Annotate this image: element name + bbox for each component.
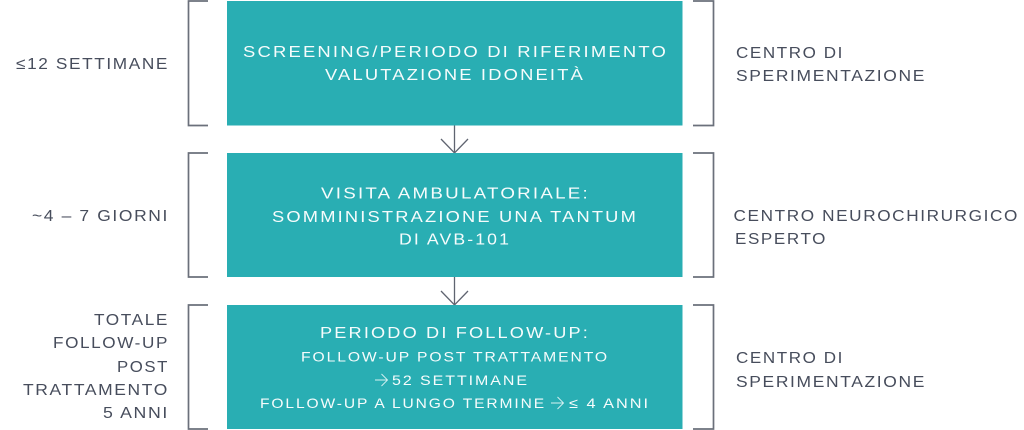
text: 52 weeks: 52 SETTIMANE — [392, 372, 529, 388]
arrow: step 2 to step 3 — [441, 277, 468, 305]
arrow: step 1 to step 2 — [441, 126, 468, 153]
left bracket: step 1 — [188, 1, 208, 126]
label: total follow-up duration — [23, 312, 169, 422]
label: site, step 1: SPERIMENTAZIONE — [736, 68, 926, 85]
text: single administration: SOMMINISTRAZIONE UNA TANTUM — [272, 209, 638, 226]
label: site, step 2 — [734, 208, 1019, 248]
text: long-term follow-up: FOLLOW-UP A LUNGO TERMINE — [260, 395, 546, 411]
label: site, step 3: CENTRO DI — [736, 350, 844, 367]
label: site, step 1 — [736, 45, 926, 85]
label: screening duration: ≤12 SETTIMANE — [16, 56, 169, 73]
heading: screening: SCREENING/PERIODO DI RIFERIMENTO — [243, 44, 668, 61]
icon: arrow to 4 years — [551, 397, 564, 409]
label: site, step 3 — [736, 350, 926, 391]
right bracket: step 2 — [693, 153, 714, 277]
label: site, step 1: CENTRO DI — [736, 45, 844, 62]
right bracket: step 3 — [693, 305, 714, 429]
text: AVB-101: DI AVB-101 — [399, 232, 511, 248]
label: site, step 3: SPERIMENTAZIONE — [736, 374, 926, 391]
panel: outpatient visit — [227, 153, 682, 277]
panel: screening — [227, 1, 682, 126]
label: visit duration: ~4 – 7 GIORNI — [32, 208, 169, 225]
text: post-treatment follow-up: FOLLOW-UP POST TRATTAMENTO — [301, 348, 609, 364]
label: site, step 2: CENTRO NEUROCHIRURGICO — [734, 208, 1019, 225]
icon: arrow to 52 weeks — [375, 374, 388, 386]
label: total follow-up duration: 5 ANNI — [103, 405, 169, 422]
label: total follow-up duration: TRATTAMENTO — [23, 382, 169, 399]
heading: follow-up period: PERIODO DI FOLLOW-UP: — [320, 325, 590, 342]
label: site, step 2: ESPERTO — [735, 231, 827, 248]
text: 4 years: ≤ 4 ANNI — [569, 395, 650, 411]
right bracket: step 1 — [693, 1, 714, 126]
label: total follow-up duration: POST — [117, 359, 169, 376]
left bracket: step 2 — [188, 153, 208, 277]
label: total follow-up duration: FOLLOW-UP — [53, 335, 169, 352]
left bracket: step 3 — [188, 305, 208, 429]
label: total follow-up duration: TOTALE — [94, 312, 169, 329]
text: eligibility: VALUTAZIONE IDONEITÀ — [325, 65, 585, 84]
heading: outpatient visit: VISITA AMBULATORIALE: — [321, 186, 590, 202]
panel: follow-up period — [227, 305, 682, 429]
